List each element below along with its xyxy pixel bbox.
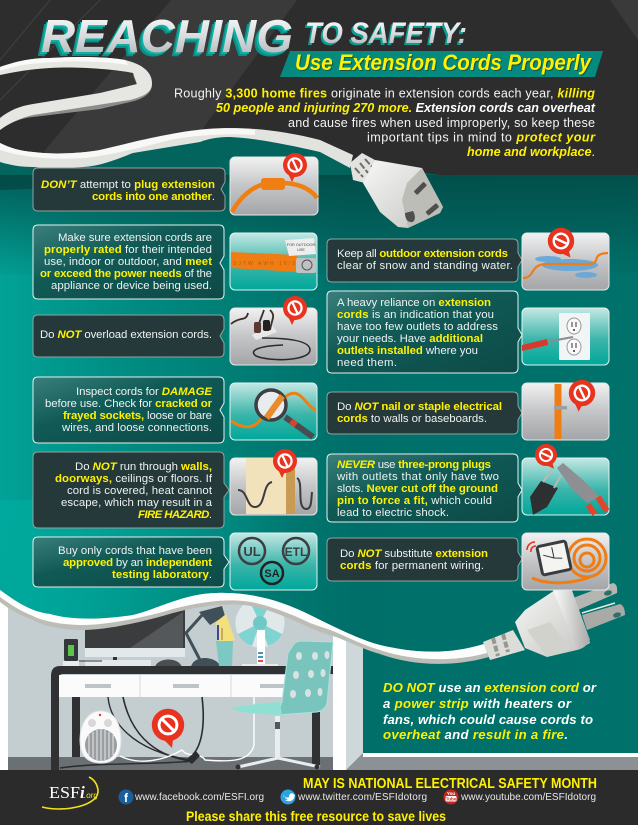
- tip: do not overload: Do NOT overload extension cords.: [40, 329, 212, 341]
- tip: additional outlets: [327, 291, 522, 373]
- bottom callout: a power strip with heaters or: [383, 696, 572, 711]
- intro text: home and workplace.: [467, 145, 595, 159]
- upper cord: [0, 57, 353, 168]
- tip: inspect cords: frayed sockets, loose or bare: [63, 410, 212, 422]
- upper loop ribbon: [0, 57, 152, 130]
- lower run ribbon: [0, 128, 353, 168]
- loop shadow: [0, 75, 152, 130]
- lower cord band: [0, 590, 489, 664]
- intro text: and cause fires when used improperly, so keep these: [288, 116, 595, 130]
- teal overlay above wave: [0, 300, 380, 645]
- monitor: [85, 605, 185, 666]
- tip: three-prong plugs: NEVER use three-prong plugs: [337, 459, 491, 471]
- pen cup: [216, 625, 233, 666]
- title: TO SAFETY:: [303, 19, 465, 52]
- ESFI logo: .org: [84, 791, 98, 800]
- no symbol: heater and power strip: [152, 709, 184, 748]
- youtube link: You: [447, 791, 455, 796]
- image: certification logos: SA: [264, 568, 280, 580]
- image: wall outlet and screwdriver: [522, 308, 609, 365]
- title: REACHING: [39, 12, 291, 64]
- tip: permanent wiring: cords for permanent wiring.: [340, 560, 484, 572]
- tip: three-prong plugs: pin to force a fit, which could: [337, 495, 492, 507]
- image: certification logos: ETL: [285, 545, 307, 559]
- tip: do not plug cords together: cords into one another.: [92, 191, 215, 203]
- bottom callout: overheat and result in a fire.: [383, 727, 568, 742]
- lamp: [186, 606, 235, 667]
- tip: do not run through walls: cord is covered, heat cannot: [67, 485, 213, 497]
- image: clock and coiled cord: [522, 533, 609, 590]
- image: overloaded power strip: [230, 293, 317, 365]
- bottom callout: DO NOT use an extension cord or: [383, 680, 597, 695]
- tip: do not nail: [327, 392, 522, 434]
- tip: properly rated: properly rated for their intended: [44, 244, 212, 256]
- title: TO SAFETY:: [305, 17, 467, 50]
- tip: additional outlets: have too few outlets to address: [337, 321, 498, 333]
- tip: do not run through walls: FIRE HAZARD.: [138, 509, 212, 521]
- tip: three-prong plugs: lead to electric shock.: [337, 507, 449, 519]
- intro text: important tips in mind to protect your: [367, 130, 596, 144]
- tip: do not run through walls: doorways, ceilings or floors. If: [55, 473, 213, 485]
- tip: three-prong plugs: with outlets that only have two: [336, 471, 499, 483]
- tip: do not plug cords together: DON’T attempt to plug extension: [41, 179, 215, 191]
- tip: inspect cords: [33, 377, 224, 443]
- strain relief: [483, 630, 525, 660]
- title: REACHING: [41, 10, 293, 62]
- tip: inspect cords: before use. Check for cracked or: [45, 398, 213, 410]
- tip: additional outlets: outlets installed where you: [337, 345, 478, 357]
- title: REACHING: [37, 14, 289, 66]
- tip: do not run through walls: Do NOT run through walls,: [75, 461, 212, 473]
- tip: do not nail: cords to walls or baseboards.: [337, 413, 487, 425]
- facebook link: f: [124, 791, 129, 805]
- desk: [51, 666, 333, 770]
- image: magnifying glass: [230, 383, 317, 440]
- tip: properly rated: or exceed the power needs of the: [40, 268, 212, 280]
- dark header background: [0, 0, 638, 190]
- facebook link: www.facebook.com/ESFI.org: [134, 792, 264, 803]
- tip: properly rated: [33, 225, 224, 299]
- title: [37, 10, 467, 66]
- subtitle banner: Use Extension Cords Properly: [295, 50, 592, 75]
- image: cord rating: [230, 233, 317, 290]
- footer: Please share this free resource to save lives: [186, 808, 446, 824]
- bottom callout: [383, 680, 597, 742]
- tip: additional outlets: your needs. Have additional: [337, 333, 483, 345]
- ESFI logo: i: [80, 783, 85, 802]
- tip: additional outlets: A heavy reliance on extension: [337, 297, 491, 309]
- image: cord in water: [522, 224, 609, 290]
- tip: properly rated: appliance or device being used.: [51, 280, 212, 292]
- space heater: [80, 711, 121, 763]
- lower plug: [483, 583, 625, 660]
- image: cord through wall: [230, 446, 317, 515]
- tip: properly rated: Make sure extension cords are: [58, 232, 212, 244]
- ESFI logo: ESF: [49, 783, 80, 802]
- room illustration: [0, 585, 638, 770]
- tip: three-prong plugs: slots. Never cut off the ground: [337, 483, 498, 495]
- mouse: [155, 659, 182, 667]
- image: cord rating: USE: [297, 248, 305, 252]
- facebook link: [118, 790, 264, 805]
- ESFI logo: [42, 777, 98, 809]
- prongs: [573, 583, 625, 630]
- tip: approved cords: [33, 537, 229, 587]
- intro text: Roughly 3,300 home fires originate in extension cords each year, killing: [174, 86, 595, 100]
- tip: do not plug cords together: [33, 168, 225, 211]
- youtube link: www.youtube.com/ESFIdotorg: [460, 792, 596, 803]
- cords under desk: [60, 697, 254, 768]
- desk fan: [235, 598, 285, 667]
- tip: three-prong plugs: [327, 454, 522, 522]
- image: plug and pliers: [522, 441, 609, 515]
- teal background: [0, 135, 638, 770]
- tip: approved cords: Buy only cords that have been: [58, 545, 212, 557]
- intro text: [174, 86, 596, 159]
- image: certification logos: UL: [243, 544, 261, 559]
- chair: [231, 641, 333, 770]
- footer: MAY IS NATIONAL ELECTRICAL SAFETY MONTH: [303, 776, 597, 792]
- image: cord rating: FOR OUTDOOR: [287, 243, 315, 247]
- image: cord rating: SJTW AWH 16/3: [233, 261, 295, 267]
- tip: approved cords: testing laboratory.: [112, 569, 212, 581]
- intro text: 50 people and injuring 270 more. Extension cords can overheat: [216, 101, 596, 115]
- tip: outdoor cords: [327, 239, 522, 282]
- tip: properly rated: use, indoor or outdoor, and meet: [44, 256, 212, 268]
- twitter link: www.twitter.com/ESFIdotorg: [297, 792, 427, 803]
- image: stapled cord: [522, 376, 609, 440]
- tip: inspect cords: wires, and loose connections.: [61, 422, 212, 434]
- youtube link: Tube: [446, 797, 457, 802]
- tip: outdoor cords: Keep all outdoor extension cords: [337, 248, 508, 260]
- tip: outdoor cords: clear of snow and standing water.: [337, 260, 513, 272]
- footer: [0, 770, 638, 825]
- image: certification logos: [230, 533, 317, 590]
- upper plug: [350, 153, 443, 228]
- overlay glow: [0, 500, 310, 619]
- tip: do not run through walls: [33, 452, 229, 528]
- tip: do not nail: Do NOT nail or staple electrical: [337, 401, 502, 413]
- bottom callout: fans, which could cause cords to: [383, 712, 593, 727]
- tip: additional outlets: need them.: [337, 357, 397, 369]
- tip: permanent wiring: Do NOT substitute extension: [340, 548, 488, 560]
- tip: inspect cords: Inspect cords for DAMAGE: [76, 386, 212, 398]
- tip: permanent wiring: [327, 538, 522, 581]
- phone dock: [63, 639, 102, 666]
- tip: do not overload: [33, 315, 224, 357]
- subtitle banner: Use Extension Cords Properly: [296, 51, 593, 76]
- tip: do not run through walls: escape, which may result in a: [61, 497, 213, 509]
- image: joined cords: [230, 150, 318, 215]
- tip: approved cords: approved by an independent: [63, 557, 212, 569]
- youtube link: [444, 790, 596, 804]
- twitter link: [280, 790, 427, 804]
- tip: additional outlets: cords is an indication that you: [337, 309, 494, 321]
